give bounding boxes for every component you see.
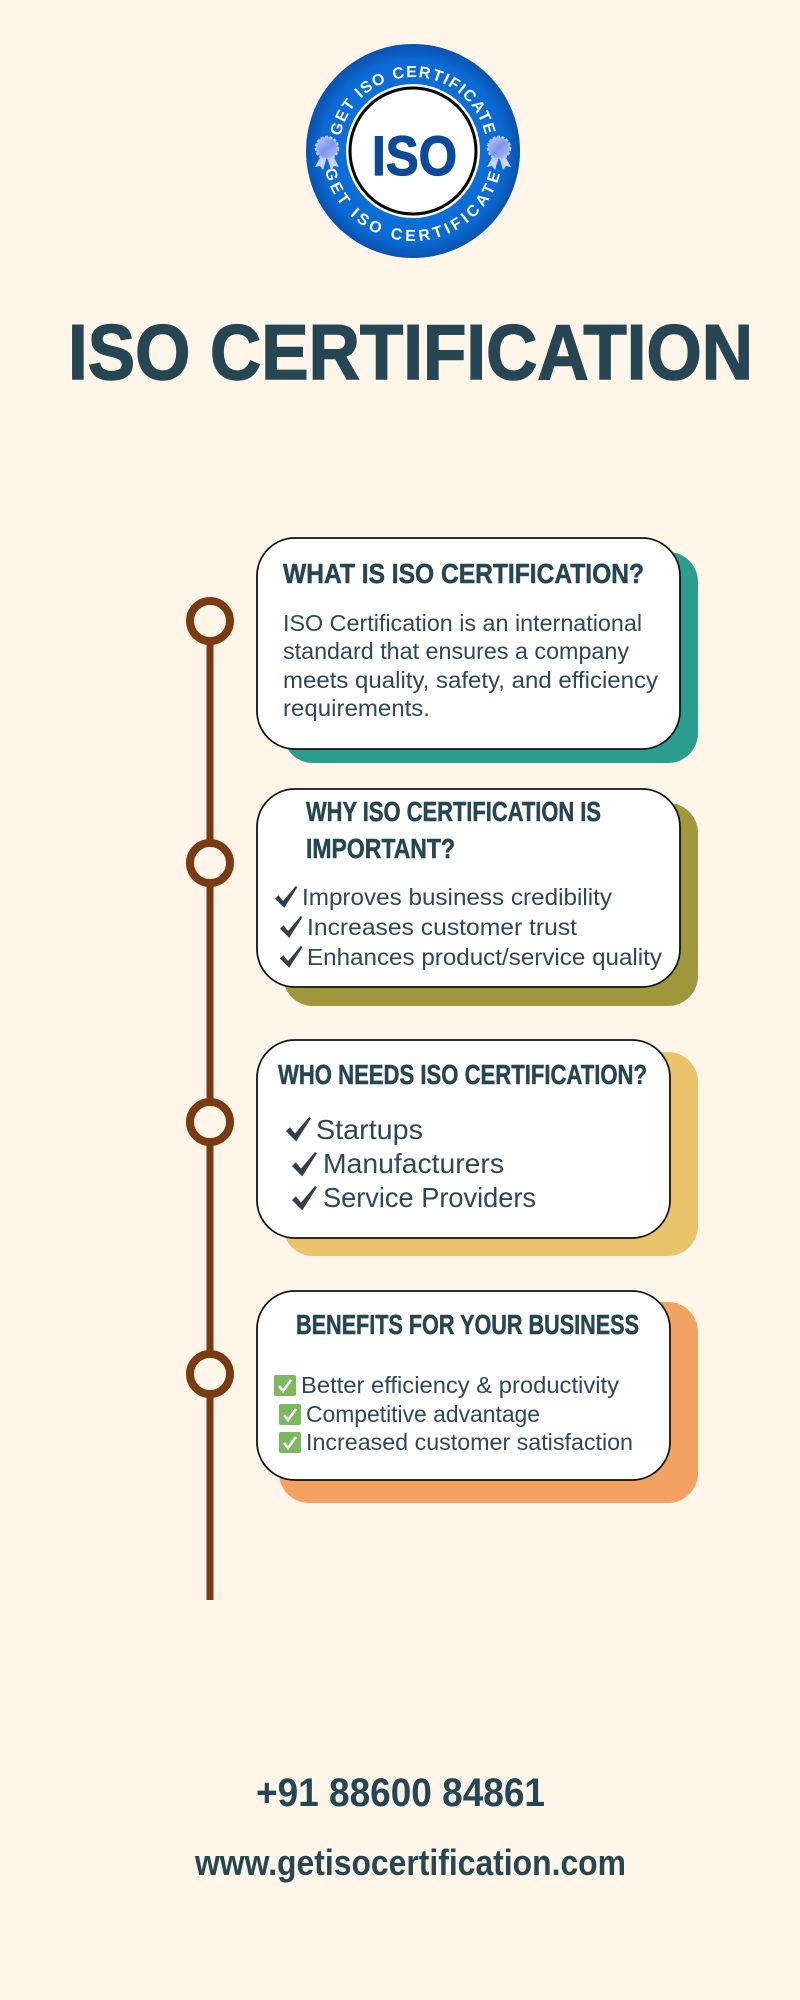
heading: WHO NEEDS ISO CERTIFICATION? [278,1059,647,1090]
heading: BENEFITS FOR YOUR BUSINESS [296,1309,639,1340]
logo centre text: ISO [372,124,457,187]
panel: why ISO certification is important [257,789,698,1006]
icon: left rosette [315,137,339,170]
checklist: Competitive advantage [306,1401,540,1427]
checklist [275,884,663,970]
description text [283,610,659,721]
description text: standard that ensures a company [283,638,630,664]
timeline node 4 [190,1354,230,1394]
heading: WHY ISO CERTIFICATION IS [306,796,601,827]
panel: benefits for your business [257,1291,698,1503]
checklist: Service Providers [323,1182,536,1213]
logo: ISO certificate badge [306,44,520,258]
checklist: Startups [316,1114,423,1145]
checklist: Better efficiency & productivity [301,1372,620,1398]
checklist: Increases customer trust [307,914,578,940]
timeline node 1 [190,601,230,641]
timeline node 2 [190,843,230,883]
logo bottom arc text: GET ISO CERTIFICATE [326,168,500,241]
icon: right rosette [487,137,511,170]
checklist: Enhances product/service quality [307,944,663,970]
title: ISO CERTIFICATION [68,308,753,396]
description text: ISO Certification is an international [283,610,642,636]
heading [306,796,601,864]
checklist [274,1372,633,1455]
panel: what is ISO certification [257,538,698,763]
description text: requirements. [283,695,430,721]
heading: WHAT IS ISO CERTIFICATION? [283,558,644,589]
timeline node 3 [190,1102,230,1142]
checklist: Increased customer satisfaction [306,1429,633,1455]
checklist: Improves business credibility [302,884,613,910]
checklist [286,1114,536,1213]
description text: meets quality, safety, and efficiency [283,667,659,693]
panel: who needs ISO certification [257,1040,698,1256]
heading: IMPORTANT? [306,833,455,864]
timeline [190,601,230,1600]
logo top arc text: GET ISO CERTIFICATE [330,66,496,134]
phone number: +91 88600 84861 [256,1771,545,1815]
checklist: Manufacturers [323,1148,504,1179]
website: www.getisocertification.com [194,1842,626,1883]
